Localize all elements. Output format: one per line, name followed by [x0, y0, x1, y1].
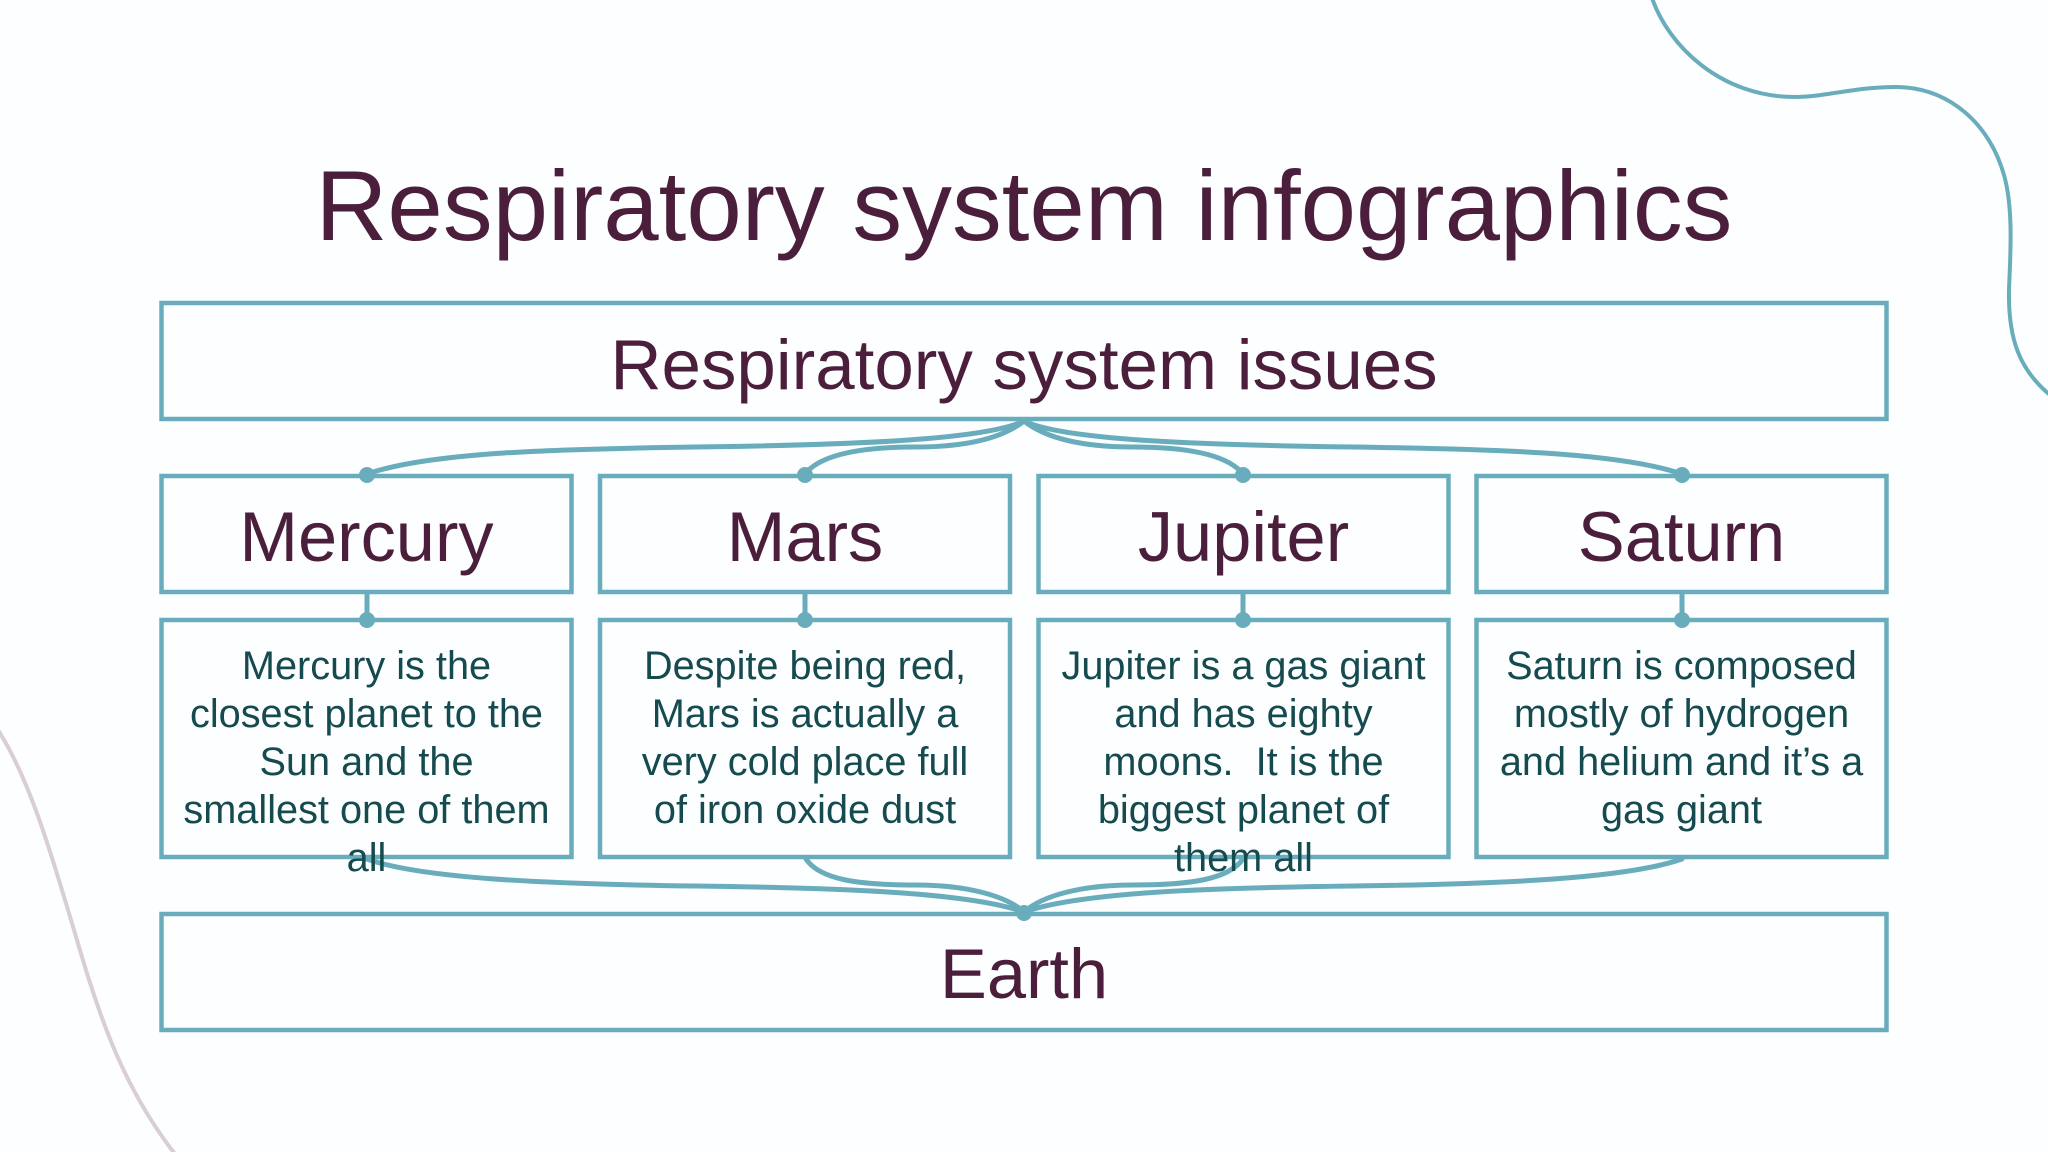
- text: Mars description: Despite being red,: [644, 644, 966, 688]
- title: Respiratory system infographics: [316, 151, 1732, 262]
- connectors: description boxes to Earth box: [367, 859, 1682, 912]
- text: Mars description: Mars is actually a: [652, 692, 959, 736]
- panel: Jupiter description: [1038, 620, 1448, 880]
- panel: Earth: [162, 914, 1886, 1030]
- text: Saturn description: Saturn is composed: [1506, 644, 1857, 688]
- text: Mercury description: Sun and the: [259, 740, 474, 784]
- text: Mercury description: closest planet to the: [190, 692, 543, 736]
- decorative curve: bottom left: [0, 730, 175, 1152]
- panel: Jupiter: [1038, 476, 1448, 592]
- text: Mercury description: smallest one of them: [183, 788, 550, 832]
- text: Saturn description: and helium and it’s a: [1500, 740, 1864, 784]
- panel: Respiratory system issues: [162, 303, 1886, 419]
- text: Saturn description: gas giant: [1601, 788, 1762, 832]
- panel: Mercury description: [162, 620, 572, 880]
- panel: Saturn description: [1476, 620, 1886, 857]
- panel: Mars: [600, 476, 1010, 592]
- heading: Earth: Earth: [940, 934, 1108, 1013]
- text: Jupiter description: them all: [1174, 836, 1313, 880]
- heading: Jupiter: Jupiter: [1138, 497, 1349, 576]
- text: Saturn description: mostly of hydrogen: [1514, 692, 1849, 736]
- text: Mars description: of iron oxide dust: [654, 788, 956, 832]
- decorative curve: top right: [1652, 0, 2048, 395]
- panel: Saturn: [1476, 476, 1886, 592]
- heading: Respiratory system issues: Respiratory system issues: [610, 326, 1438, 405]
- text: Mercury description: all: [347, 836, 386, 880]
- heading: Saturn: Saturn: [1578, 497, 1785, 576]
- heading: Mars: Mars: [727, 497, 883, 576]
- text: Mercury description: Mercury is the: [242, 644, 491, 688]
- connectors: planet boxes to description boxes: [367, 593, 1682, 618]
- text: Jupiter description: moons. It is the: [1103, 740, 1384, 784]
- text: Jupiter description: biggest planet of: [1098, 788, 1390, 832]
- connectors: top box to planet boxes: [367, 421, 1682, 474]
- panel: Mercury: [162, 476, 572, 592]
- text: Mars description: very cold place full: [642, 740, 968, 784]
- connector dots: [359, 467, 1690, 921]
- text: Jupiter description: and has eighty: [1114, 692, 1373, 736]
- text: Jupiter description: Jupiter is a gas giant: [1061, 644, 1426, 688]
- heading: Mercury: Mercury: [239, 497, 494, 576]
- panel: Mars description: [600, 620, 1010, 857]
